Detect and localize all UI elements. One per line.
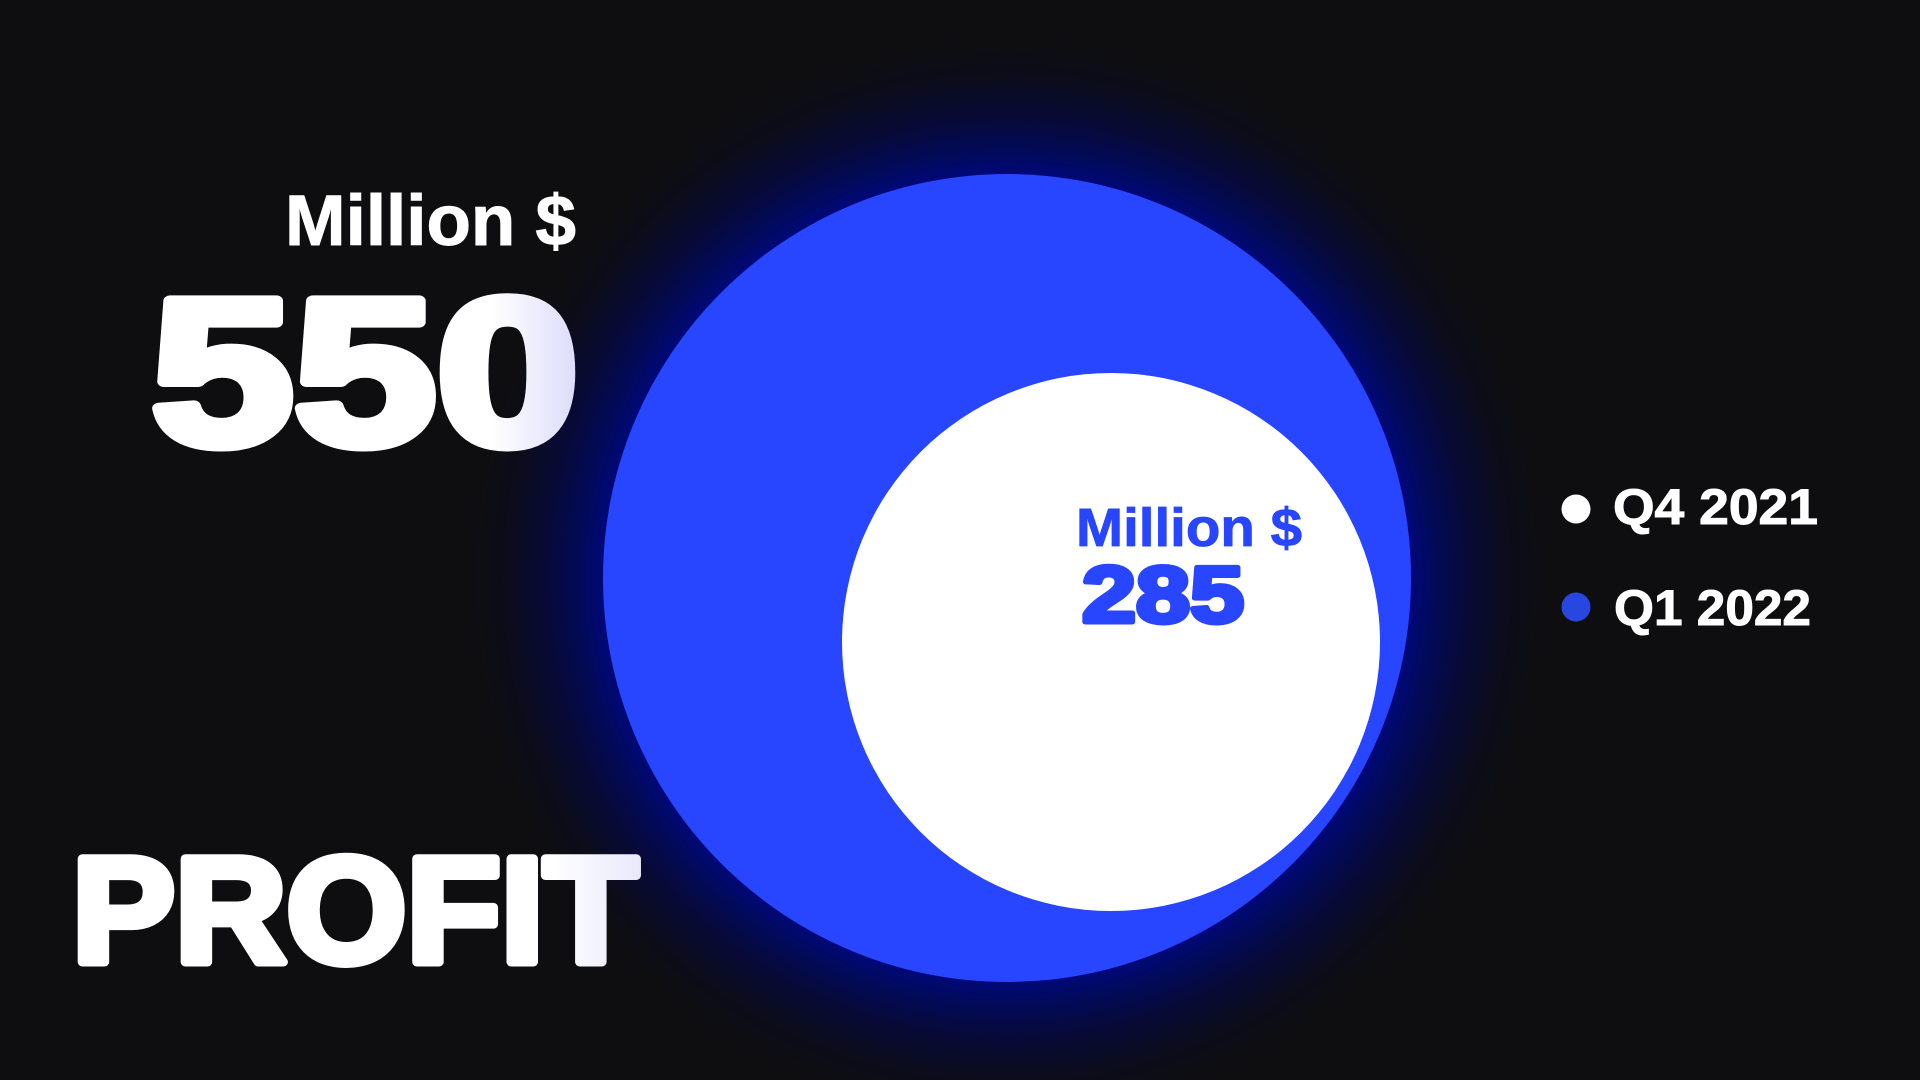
title: PROFIT: PROFIT (72, 826, 638, 994)
circle: Q4 2021 profit (842, 373, 1380, 911)
label: Million $ white: Million $ (285, 182, 576, 261)
circle: Q1 2022 profit (603, 174, 1411, 982)
label: Million $ blue: Million $ (1076, 498, 1302, 558)
value: 550: 550 (151, 257, 579, 489)
value: 285: 285 (1082, 550, 1244, 639)
legend: Q4 2021: Q4 2021 (1613, 479, 1818, 535)
legend: Q1 2022: Q1 2022 (1614, 580, 1811, 636)
